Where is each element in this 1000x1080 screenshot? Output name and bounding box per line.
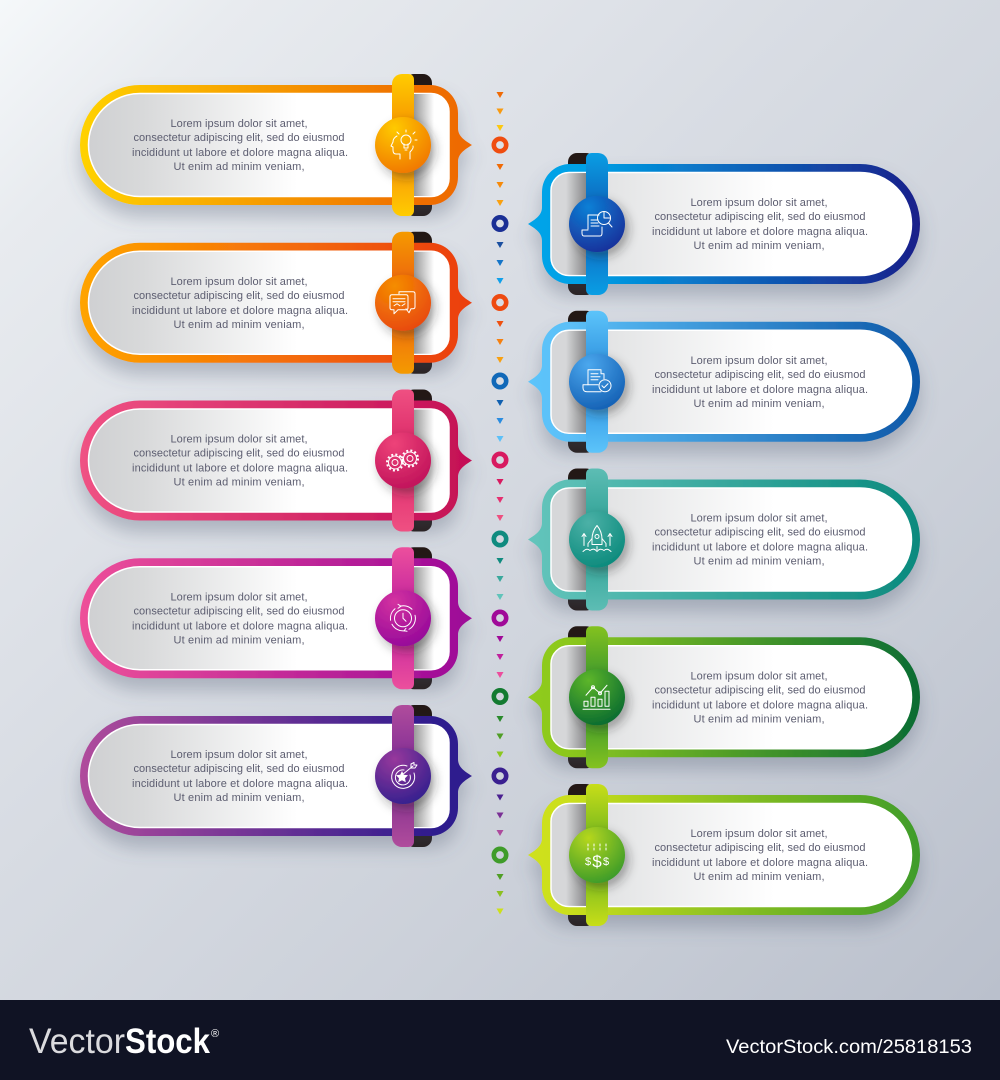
icon: chat bubbles in orange-red ball [375,275,431,331]
panel: left card 4 [80,547,472,689]
footer bar [0,1000,1000,1080]
text: left card 1: Ut enim ad minim veniam, [174,161,304,173]
text: right card 3: Ut enim ad minim veniam, [694,556,824,568]
text: right card 3: consectetur adipiscing elit, sed do eiusmod [654,526,866,538]
icon: falling dollars in lime ball: $ [592,852,602,871]
icon: rocket in teal ball [569,512,625,568]
text: left card 3: consectetur adipiscing elit, sed do eiusmod [134,448,344,460]
text: right card 3: incididunt ut labore et dolore magna aliqua. [652,542,868,554]
panel: right card 2 [528,311,920,453]
panel: right card 3 [528,468,920,610]
icon: falling dollars in lime ball: $ [603,856,609,868]
icon: document and magnifier in blue ball [569,196,625,252]
icon: target and arrow in purple ball [375,748,431,804]
text: left card 1: Lorem ipsum dolor sit amet, [170,118,308,130]
text: left card 2: Ut enim ad minim veniam, [174,319,304,331]
icon: falling dollars in lime ball: $ [585,856,591,868]
text: right card 1: Lorem ipsum dolor sit amet, [690,197,828,209]
text: right card 2 [652,355,868,410]
panel: left card 2 [80,232,472,374]
text: right card 4: incididunt ut labore et dolore magna aliqua. [652,699,868,711]
text: left card 1: consectetur adipiscing elit, sed do eiusmod [134,132,344,144]
footer logo: VectorStock.com/25818153 [726,1037,972,1058]
icon: checked document in light blue ball [569,354,625,410]
text: right card 5 [652,828,868,883]
text: left card 2: incididunt ut labore et dolore magna aliqua. [132,305,348,317]
text: right card 4: consectetur adipiscing elit, sed do eiusmod [654,684,866,696]
text: right card 1: consectetur adipiscing elit, sed do eiusmod [654,211,866,223]
text: right card 2: Lorem ipsum dolor sit amet, [690,355,828,367]
text: left card 3: Ut enim ad minim veniam, [174,476,304,488]
text: right card 4 [652,670,868,725]
text: left card 3: Lorem ipsum dolor sit amet, [170,434,308,446]
text: right card 5: Ut enim ad minim veniam, [694,871,824,883]
panel: right card 5 [528,784,920,926]
panel: right card 4 [528,626,920,768]
footer logo: Vector [29,1022,125,1061]
text: right card 3 [652,512,868,568]
icon: gears in pink ball [375,432,431,488]
panel: right card 1 [528,153,920,295]
text: left card 4: consectetur adipiscing elit, sed do eiusmod [134,605,344,617]
text: left card 4: Ut enim ad minim veniam, [174,634,304,646]
icon: falling dollars in lime ball [569,827,625,883]
text: right card 1 [652,197,868,252]
text: right card 2: consectetur adipiscing elit, sed do eiusmod [654,369,866,381]
text: left card 3 [132,434,348,488]
text: left card 4: Lorem ipsum dolor sit amet, [170,591,308,603]
text: right card 4: Lorem ipsum dolor sit amet, [690,670,828,682]
text: left card 5: incididunt ut labore et dolore magna aliqua. [132,778,348,790]
text: left card 5: consectetur adipiscing elit, sed do eiusmod [134,763,344,775]
text: left card 2 [132,276,348,331]
text: right card 2: Ut enim ad minim veniam, [694,398,824,410]
panel: left card 1 [80,74,472,216]
text: left card 4 [132,591,348,646]
timeline: rings and triangles [494,92,506,914]
text: right card 4: Ut enim ad minim veniam, [694,713,824,725]
icon: clock with arrows in magenta ball [375,590,431,646]
text: right card 5: consectetur adipiscing elit, sed do eiusmod [654,842,866,854]
text: left card 5: Ut enim ad minim veniam, [174,792,304,804]
text: left card 3: incididunt ut labore et dolore magna aliqua. [132,462,348,474]
text: left card 1 [132,118,348,173]
icon: idea head in orange ball [375,117,431,173]
footer logo: Stock [125,1022,210,1061]
text: right card 3: Lorem ipsum dolor sit amet, [690,512,828,524]
text: right card 2: incididunt ut labore et dolore magna aliqua. [652,384,868,396]
text: left card 1: incididunt ut labore et dolore magna aliqua. [132,147,348,159]
text: left card 2: consectetur adipiscing elit, sed do eiusmod [134,290,344,302]
panel: left card 3 [80,390,472,532]
text: left card 4: incididunt ut labore et dolore magna aliqua. [132,620,348,632]
footer logo [29,1022,972,1061]
text: right card 5: Lorem ipsum dolor sit amet, [690,828,828,840]
panel: left card 5 [80,705,472,847]
text: right card 1: Ut enim ad minim veniam, [694,240,824,252]
text: right card 1: incididunt ut labore et dolore magna aliqua. [652,226,868,238]
text: left card 5: Lorem ipsum dolor sit amet, [170,749,308,761]
footer logo: ® [211,1028,219,1040]
text: left card 5 [132,749,348,804]
icon: rising bar chart in green ball [569,669,625,725]
text: right card 5: incididunt ut labore et dolore magna aliqua. [652,857,868,869]
text: left card 2: Lorem ipsum dolor sit amet, [170,276,308,288]
